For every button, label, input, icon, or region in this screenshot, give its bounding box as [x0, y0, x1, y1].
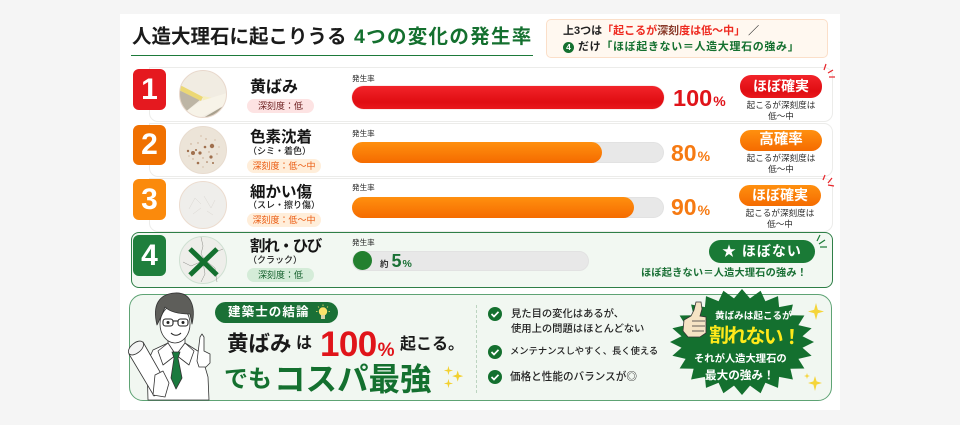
callout: summary note: だけ「ほぼ起きない＝人造大理石の強み」	[578, 41, 799, 53]
severity pill	[247, 268, 314, 282]
row 4 card	[131, 232, 833, 288]
bar track	[352, 142, 664, 163]
severity pill	[247, 213, 321, 227]
closing line 1: それが人造大理石の	[694, 354, 787, 365]
note	[746, 100, 815, 121]
badge 3	[133, 179, 166, 220]
bar 80%	[352, 142, 602, 163]
callout: summary note: 4	[566, 42, 571, 52]
note	[746, 208, 814, 229]
strength note: ほぼ起きない＝人造大理石の強み！	[641, 268, 807, 279]
5% value: 約5%	[380, 251, 412, 271]
tag: ほぼ確実	[753, 78, 809, 94]
note: 起こるが深刻度は	[747, 153, 815, 163]
percent value: 80%	[671, 140, 710, 166]
burst marks	[816, 234, 827, 248]
badge 4	[133, 235, 166, 276]
tag	[740, 75, 822, 98]
badge 2	[133, 125, 166, 165]
headline: yellowing 100% happens: 起こる。	[400, 336, 464, 353]
percent value: 90%	[671, 194, 710, 220]
badge 3: 3	[141, 183, 158, 216]
headline: yellowing 100% happens: 100%	[320, 325, 394, 364]
callout: summary note	[546, 19, 828, 58]
name: 黄ばみ	[250, 79, 298, 96]
row 4: cracks	[131, 232, 833, 288]
bar label: 発生率	[352, 183, 375, 192]
benefit 1: 見た目の変化はあるが、	[511, 309, 624, 320]
icon: sparkle top right	[808, 303, 824, 320]
divider	[476, 305, 477, 393]
note	[746, 153, 815, 174]
note: 起こるが深刻度は	[747, 100, 815, 110]
bar label: 発生率	[352, 238, 375, 247]
burst marks	[822, 174, 834, 187]
bar track	[352, 197, 664, 218]
row 1 card	[149, 67, 833, 122]
main line: 割れない！	[709, 325, 800, 349]
check 2	[488, 345, 502, 359]
bar label: 発生率	[352, 74, 375, 83]
note: 低〜中	[767, 219, 793, 229]
sub name: （クラック）	[248, 255, 302, 265]
percent value: 100%	[673, 85, 726, 111]
headline: best value: でも	[224, 366, 272, 393]
row 3: fine scratches	[133, 174, 834, 232]
note: 低〜中	[768, 111, 794, 121]
severity pill	[247, 99, 314, 113]
check 1	[488, 307, 502, 321]
badge 1	[133, 69, 166, 110]
icon: sparkles bottom right	[804, 373, 822, 391]
illustration: architect	[128, 292, 210, 400]
benefit 2: メンテナンスしやすく、長く使える	[510, 346, 658, 356]
title	[131, 24, 533, 56]
bar label: 発生率	[352, 129, 375, 138]
photo: yellowed edge	[179, 70, 227, 118]
name: 細かい傷	[250, 184, 312, 201]
benefit 3: 価格と性能のバランスが◎	[510, 371, 637, 383]
row 3 card	[149, 178, 833, 232]
bar 100%	[352, 86, 664, 109]
icon: sparkles	[444, 366, 464, 388]
lead line: 黄ばみは起こるが	[715, 311, 792, 322]
benefits list	[488, 307, 658, 384]
badge 1: 1	[141, 73, 158, 106]
callout: summary note: 上3つは「起こるが深刻度は低〜中」 ／	[563, 25, 759, 37]
row 2 card	[149, 123, 833, 177]
benefit 1: 使用上の問題はほとんどない	[511, 324, 644, 335]
5% dot	[353, 251, 372, 270]
badge 2: 2	[141, 128, 158, 161]
tag	[739, 185, 821, 206]
photo: cracks with X	[179, 236, 227, 284]
tag: ★ ほぼない	[722, 243, 802, 259]
title: 人造大理石に起こりうる	[132, 26, 347, 48]
pill: architect's conclusion: 建築士の結論	[228, 305, 310, 319]
name: 色素沈着	[250, 129, 312, 146]
name: 割れ・ひび	[250, 238, 321, 255]
severity pill: 深刻度：低	[258, 101, 303, 111]
icon: light bulb	[316, 304, 330, 319]
severity pill: 深刻度：低	[258, 270, 303, 280]
headline: best value	[224, 361, 464, 397]
tag: ほぼ確実	[752, 187, 808, 203]
sub name: （スレ・擦り傷）	[248, 200, 320, 210]
headline: yellowing 100% happens	[227, 325, 464, 364]
check 3	[488, 370, 502, 384]
badge 4: 4	[141, 239, 158, 272]
panel: conclusion	[129, 294, 832, 401]
severity pill	[247, 159, 321, 173]
note: 低〜中	[768, 164, 794, 174]
starburst shape	[670, 289, 814, 395]
tag	[740, 130, 822, 151]
photo: stains	[179, 126, 227, 174]
row 2: pigmentation	[133, 123, 833, 177]
closing line 2: 最大の強み！	[705, 369, 775, 382]
severity pill: 深刻度：低〜中	[252, 215, 316, 225]
bar 90%	[352, 197, 634, 218]
pill: architect's conclusion	[215, 302, 338, 323]
row 1: yellowing	[133, 64, 835, 122]
tag: 高確率	[759, 132, 803, 148]
headline: yellowing 100% happens: は	[296, 335, 312, 352]
benefit 1	[511, 308, 644, 335]
tag	[709, 240, 815, 263]
sub name: （シミ・着色）	[248, 146, 311, 156]
headline: yellowing 100% happens: 黄ばみ	[227, 332, 292, 356]
note: 起こるが深刻度は	[746, 208, 814, 218]
headline: best value: コスパ最強	[274, 361, 432, 397]
white page panel	[120, 14, 840, 410]
title: 4つの変化の発生率	[354, 26, 533, 48]
icon: thumbs up	[682, 302, 706, 338]
starburst badge	[670, 289, 814, 395]
severity pill: 深刻度：低〜中	[252, 161, 316, 171]
burst marks	[824, 64, 835, 78]
photo: scratches	[179, 181, 227, 229]
bar track	[352, 251, 589, 271]
